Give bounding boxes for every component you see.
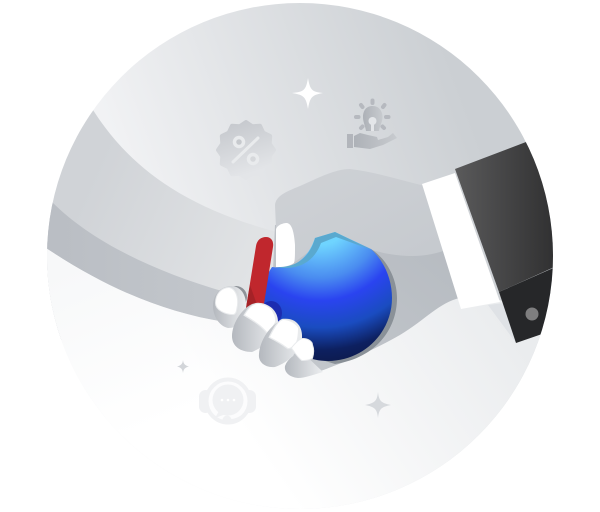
icon: percent badge	[218, 122, 274, 178]
ball shadow	[322, 249, 397, 364]
icon: support headset chat	[199, 380, 256, 424]
sparkle: lower right	[365, 392, 391, 418]
icon: hand holding light bulb	[347, 100, 397, 149]
finger shadow on ball	[260, 301, 282, 325]
finger 4	[285, 352, 323, 378]
finger 1	[213, 286, 246, 328]
arm: lower shade	[273, 225, 458, 370]
blue ball	[262, 232, 392, 361]
fingers	[213, 286, 323, 378]
finger 1 shadow	[225, 286, 247, 308]
band: light wave	[47, 110, 246, 290]
sleeve shadow	[488, 303, 516, 343]
band: dark wave	[47, 202, 220, 330]
ball cut edge	[276, 232, 372, 268]
floor	[40, 244, 560, 512]
sparkle: top	[292, 78, 323, 109]
sleeve cuff	[499, 268, 553, 343]
arm: upper hand	[275, 169, 446, 262]
white shirt cuff	[422, 173, 500, 309]
floor: left tint	[47, 249, 140, 298]
jacket sleeve	[455, 142, 553, 292]
white thumb	[276, 223, 295, 267]
finger 2	[232, 303, 278, 352]
finger 3	[259, 319, 302, 367]
cuff button	[526, 308, 538, 320]
sparkle: lower left	[177, 360, 189, 373]
red strap	[246, 237, 273, 310]
